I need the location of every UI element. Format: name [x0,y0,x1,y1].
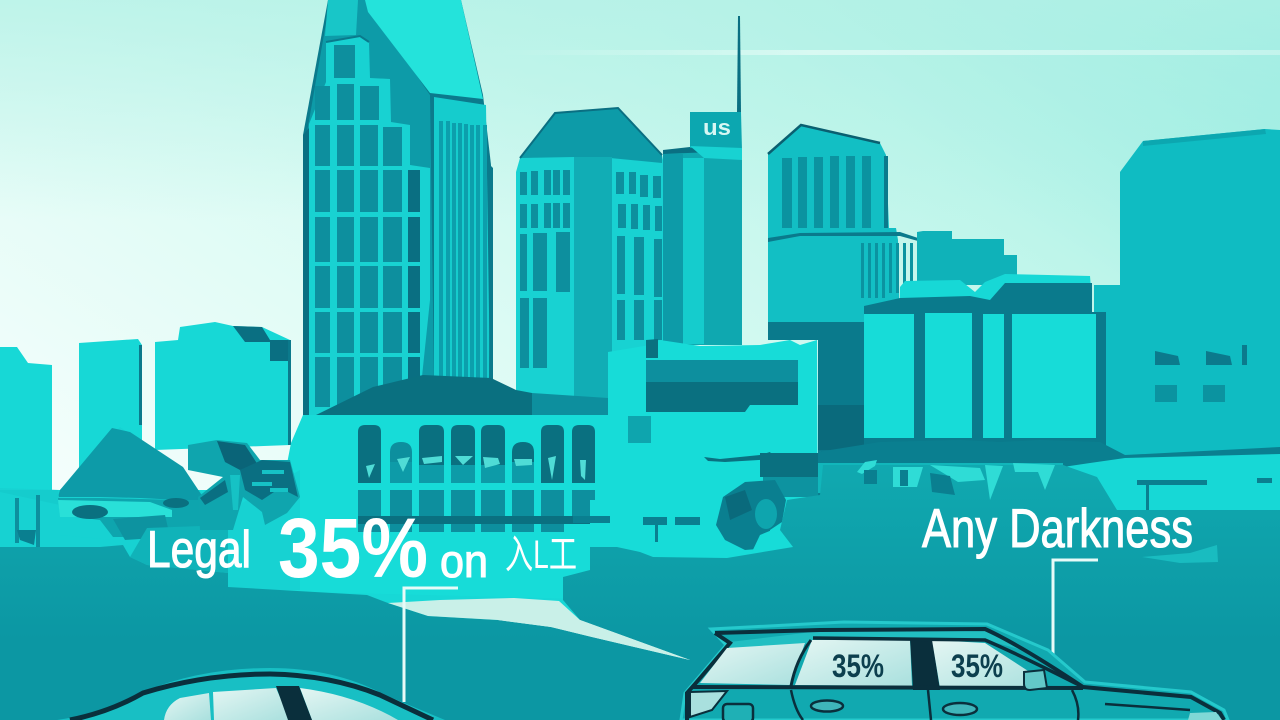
label: legal 35% on: 入L工 [505,533,577,577]
stream highlight [388,598,690,660]
lower roof extension [532,393,608,415]
tower window grid [315,45,420,407]
light ground patch [1142,545,1218,563]
stepped mid-rise behind [917,231,1017,285]
twin-wing tower [516,108,665,400]
leader line: any darkness to SUV [1053,560,1098,662]
bright patches under hedge [857,460,1055,500]
sign emblem: us [703,115,731,140]
label: any darkness: Any Darkness [922,497,1193,559]
pillar [910,638,940,690]
right lamp posts [1137,478,1272,510]
main tower [303,0,493,415]
far right tall building [1094,129,1280,460]
rear quarter glass [700,643,805,685]
left plaza and pyramid roof [0,427,300,590]
dark hedge silhouettes [864,470,955,495]
car: sedan [57,668,445,720]
label: legal 35% on [147,501,577,595]
street band with dark hedge [818,440,1280,520]
left trees [72,440,300,530]
base roof [316,375,532,415]
left background buildings [0,322,291,500]
antenna tower [663,16,742,345]
window label 35%: 35% [832,648,884,684]
arched low building [230,415,620,600]
label: legal 35% on: Legal [147,521,251,579]
rear door window [795,640,912,686]
bright base plane [0,490,1280,620]
dome building [768,125,918,452]
front door window [932,640,1042,688]
bright plaza building [590,339,823,560]
mirror [1024,670,1047,690]
ground [0,465,1280,720]
right tree [716,480,797,556]
window label 35% second: 35% [951,648,1003,684]
mid-tone patch behind legal [130,525,228,573]
small lamp posts [573,516,700,542]
label: legal 35% on: on [440,535,488,587]
label: legal 35% on: 35% [278,501,428,595]
leader line: legal label to sedan [404,588,458,702]
car: SUV with tinted windows [681,622,1228,720]
bright office block [864,274,1106,450]
